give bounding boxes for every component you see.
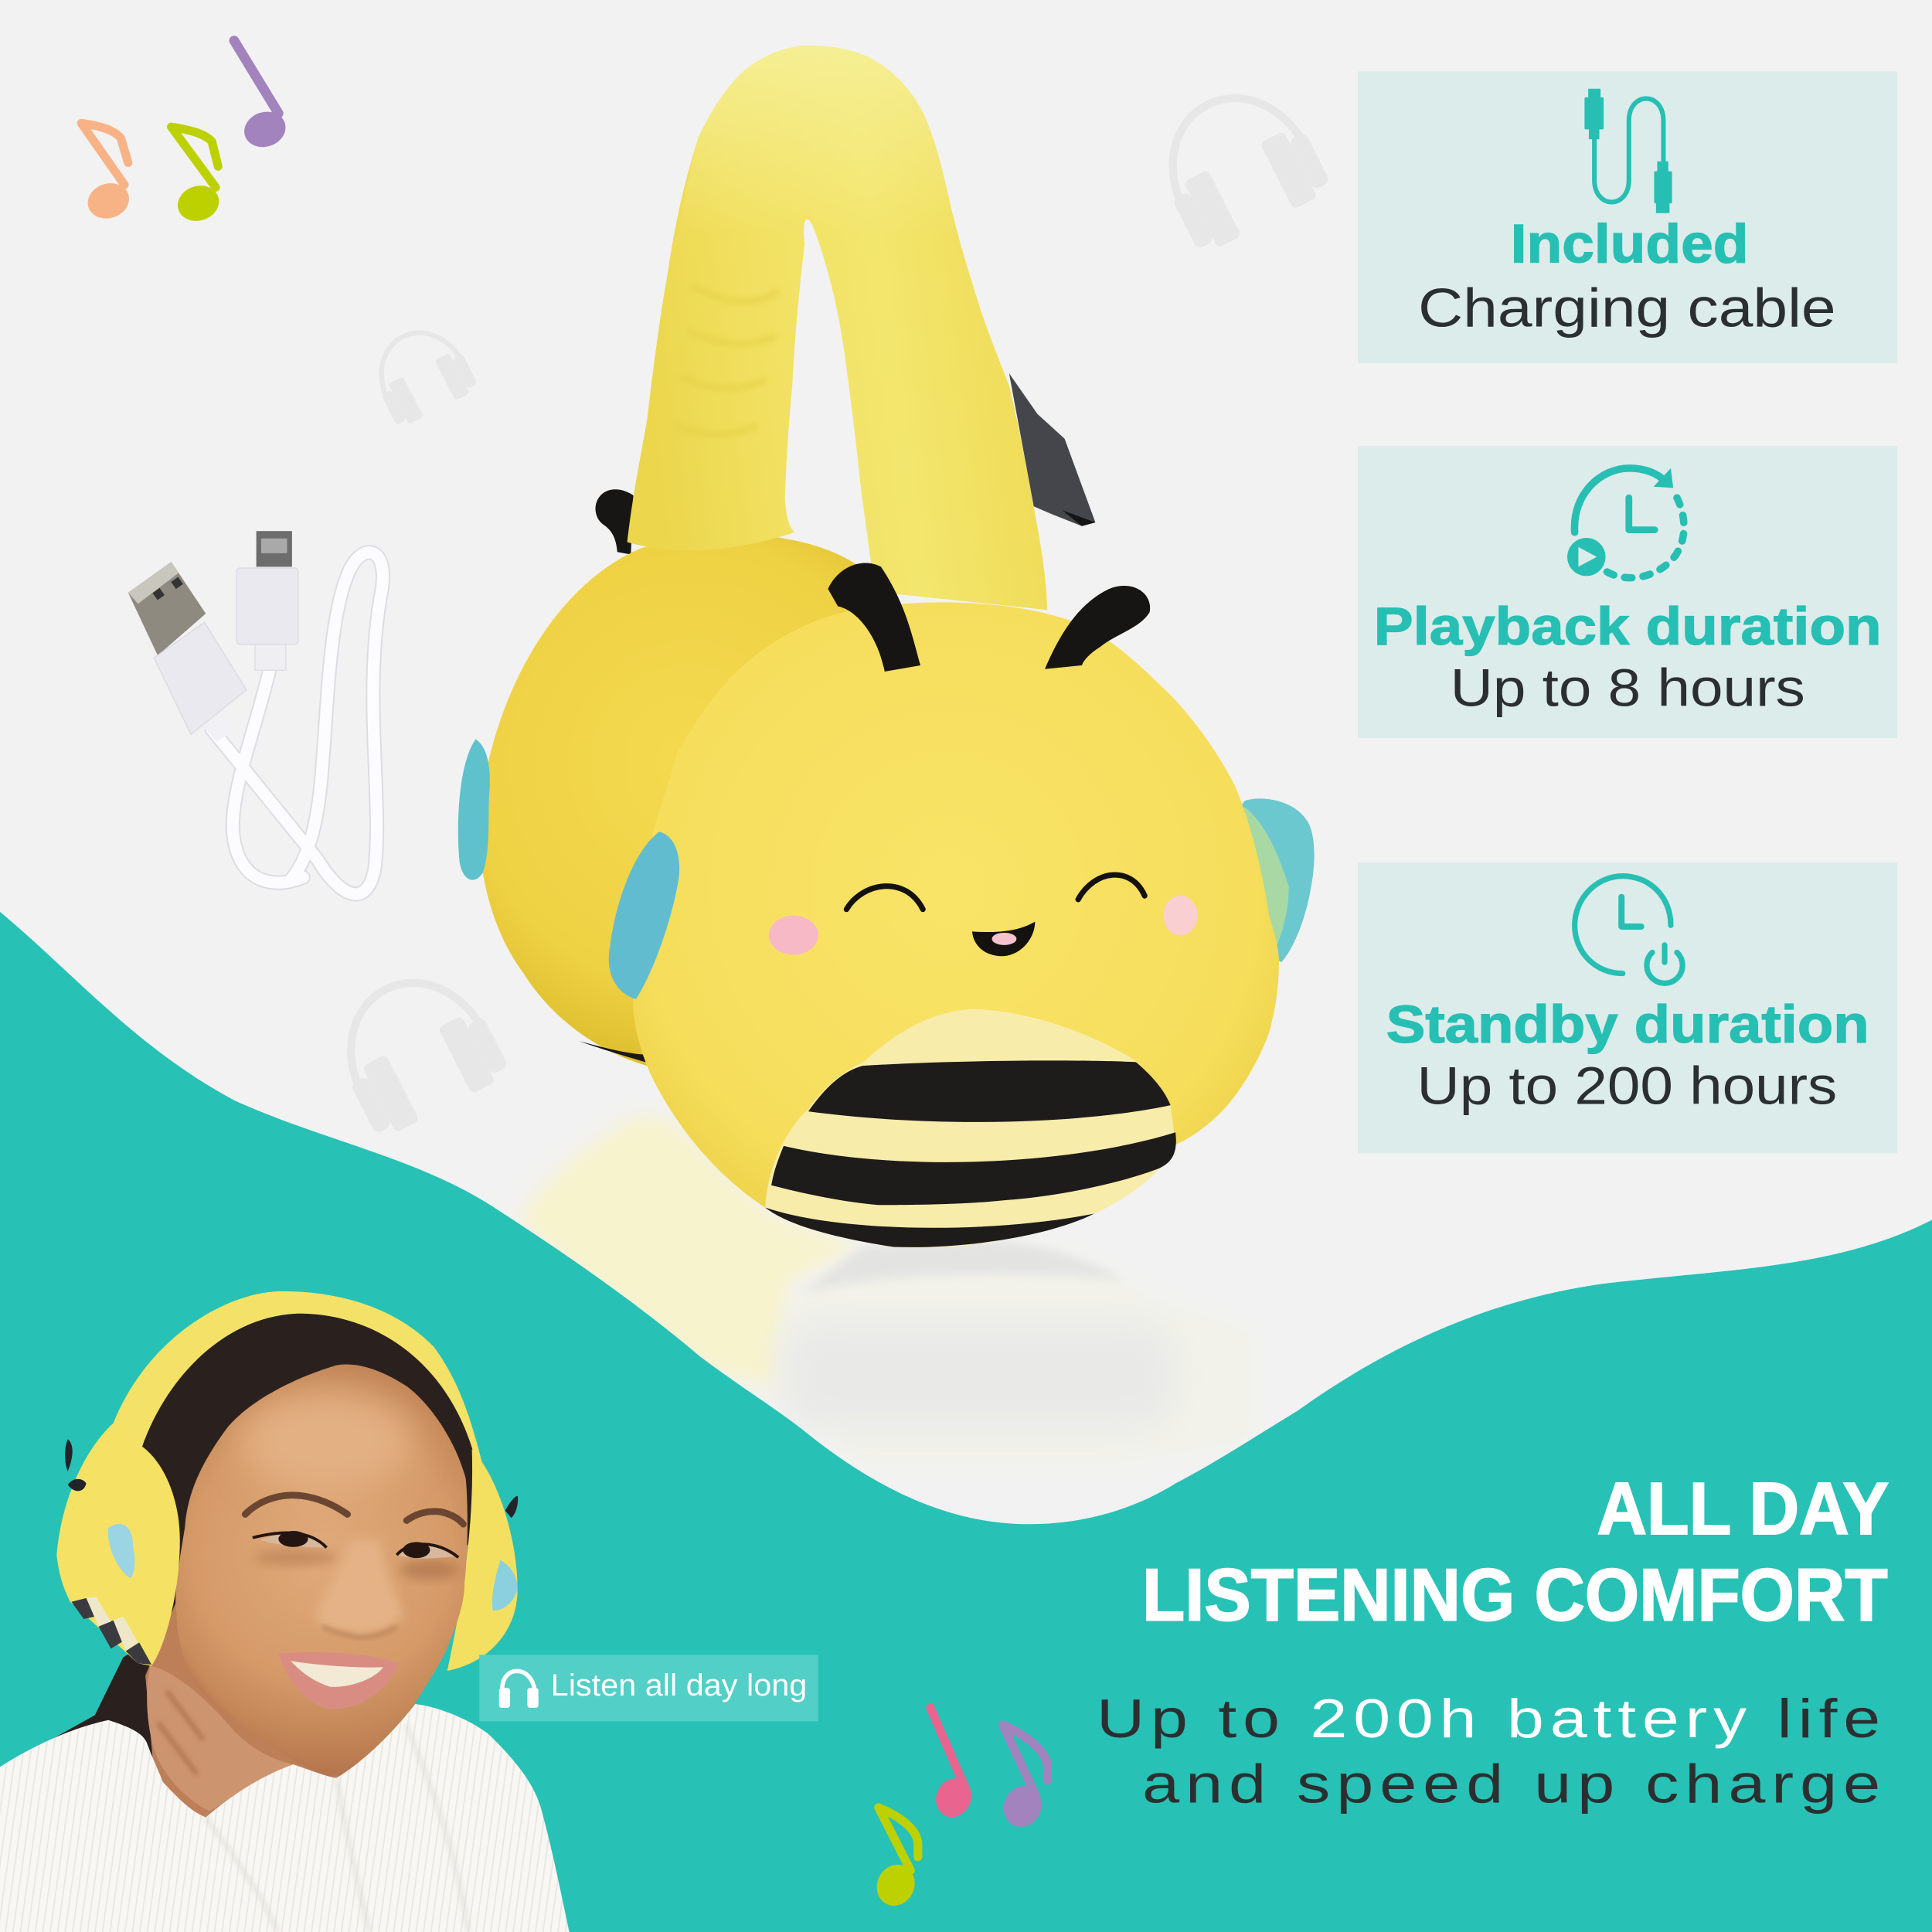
- headline: [1142, 1468, 1889, 1637]
- mouth and teeth: [278, 1652, 398, 1709]
- note: orange: [81, 123, 134, 223]
- icon: ghost headphones top: [1141, 71, 1334, 257]
- text: Up to 8 hours: [1451, 658, 1805, 718]
- belly stripe 1: [808, 1060, 1171, 1122]
- USB-A body: [154, 622, 247, 742]
- right ear cup: [447, 1449, 518, 1671]
- headband ribs: [675, 286, 779, 434]
- wing right: [1219, 798, 1315, 962]
- back wing: [458, 740, 490, 880]
- headband pale top: [679, 46, 955, 234]
- back antenna: [595, 489, 634, 554]
- hair behind: [22, 1314, 474, 1787]
- headline: LISTENING COMFORT: [1142, 1554, 1888, 1637]
- front ear cup: [633, 602, 1279, 1247]
- left cup bee detail: [68, 1479, 151, 1665]
- note: pink: [930, 1708, 978, 1823]
- panel: standby duration: [1358, 862, 1897, 1153]
- right wing: [492, 1560, 518, 1611]
- icon: playback clock: [1567, 468, 1684, 578]
- text: Up to 200 hours: [1417, 1056, 1837, 1116]
- photo: smiling girl wearing the headphones: [0, 1291, 570, 1932]
- back ear cup: [479, 535, 887, 1066]
- panel: playback duration: [1358, 446, 1897, 738]
- belly stripe 2: [771, 1132, 1176, 1205]
- micro USB connector: [236, 531, 298, 670]
- heading: Standby duration: [1386, 995, 1869, 1054]
- heading: Included: [1511, 213, 1748, 274]
- icon: headphones: [499, 1671, 539, 1708]
- note: purple: [997, 1725, 1048, 1833]
- antenna left: [828, 563, 920, 672]
- eyes: [253, 1531, 458, 1559]
- right under-eye shadow: [400, 1560, 458, 1580]
- note: purple: [234, 41, 290, 152]
- face: eyes: [846, 875, 1145, 910]
- neck and hand: [145, 1602, 431, 1836]
- antenna right: [1045, 586, 1150, 669]
- note: lime: [172, 127, 223, 226]
- callout: listen all day long: [479, 1655, 818, 1721]
- text: Charging cable: [1418, 277, 1836, 338]
- product photo: USB charging cable: [128, 531, 383, 894]
- subheading: and speed up charge: [1142, 1753, 1886, 1815]
- label: Listen all day long: [551, 1668, 807, 1702]
- cable cord: [212, 553, 383, 894]
- subheading: Up to 200h battery life: [1097, 1688, 1886, 1749]
- USB-A metal plug: [128, 562, 206, 655]
- jaw shadow: [191, 1674, 209, 1699]
- belly stripe 3: [765, 1207, 1094, 1247]
- fabric tag: [1009, 373, 1095, 526]
- icon: cable: [1584, 89, 1672, 213]
- face: mouth: [972, 922, 1035, 956]
- hand fingers highlight: [147, 1666, 293, 1811]
- face: cheeks: [769, 896, 1198, 955]
- icon: ghost headphones small: [362, 316, 480, 430]
- headband: [114, 1291, 483, 1466]
- subheading: [1097, 1688, 1886, 1815]
- left antenna: [65, 1439, 73, 1471]
- nose: [315, 1540, 403, 1638]
- product photo: reflection on the floor: [518, 1114, 1253, 1466]
- face: [175, 1365, 468, 1777]
- headband: [628, 46, 1047, 610]
- icon: music notes bottom: [870, 1708, 1048, 1912]
- forehead light: [240, 1393, 413, 1491]
- teal wave background: [0, 912, 1932, 1932]
- wing left: [609, 832, 679, 999]
- left ear cup: [56, 1423, 180, 1666]
- heading: Playback duration: [1374, 597, 1882, 656]
- headline: ALL DAY: [1597, 1468, 1889, 1550]
- icon: music notes top left: [81, 41, 290, 226]
- eyebrows: [245, 1495, 463, 1524]
- icon: standby clock: [1575, 876, 1682, 983]
- icon: ghost headphones lower: [319, 956, 512, 1141]
- right antenna: [505, 1496, 518, 1518]
- note: lime: [870, 1808, 921, 1912]
- panel: charging cable: [1358, 71, 1897, 363]
- under-eye shadow: [253, 1549, 338, 1566]
- product photo: plush bee headphones: [458, 46, 1315, 1247]
- back cup black trim: [579, 1041, 651, 1062]
- white sweater: [0, 1704, 570, 1932]
- belly: [765, 1009, 1176, 1247]
